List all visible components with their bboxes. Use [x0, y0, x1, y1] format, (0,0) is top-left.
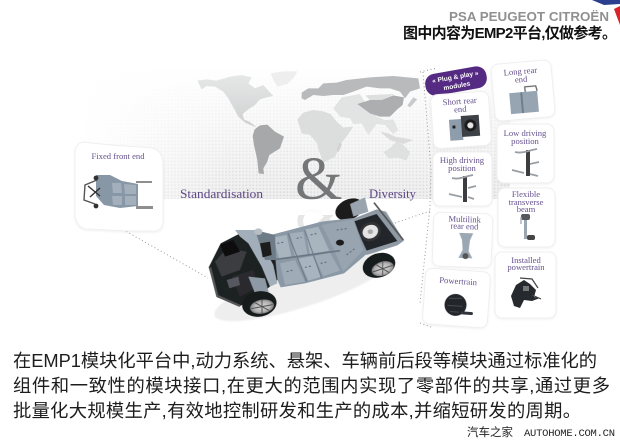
world map	[197, 71, 420, 174]
car platform chassis	[208, 194, 404, 335]
car shadow	[208, 239, 398, 335]
body text	[13, 350, 610, 421]
wheel: front near	[240, 289, 279, 319]
panel: flexible transverse beam: beam	[517, 204, 536, 214]
body text: 在EMP1模块化平台中,动力系统、悬架、车辆前后段等模块通过标准化的	[13, 350, 597, 371]
map: Russia and Europe	[302, 76, 420, 100]
panel: installed powertrain: Installed	[511, 255, 541, 265]
icon: transverse beam	[521, 214, 535, 240]
ampersand: &	[295, 146, 342, 213]
panel: short rear end: Short rear	[442, 95, 477, 107]
icon: low driving suspension	[512, 149, 539, 176]
panel: multilink rear end: rear end	[450, 221, 479, 232]
label: Diversity: Diversity	[369, 187, 417, 201]
panel: long rear end	[491, 59, 555, 122]
map: Middle East and South Asia	[333, 94, 398, 135]
panel: multilink rear end	[432, 212, 493, 268]
floor pan	[270, 218, 367, 287]
body text: 批量化大规模生产,有效地控制研发和生产的成本,并缩短研发的周期。	[13, 400, 581, 421]
panel: flexible transverse beam: transverse	[509, 197, 544, 207]
engine bay	[209, 228, 277, 306]
brand name: PSA PEUGEOT CITROËN	[449, 9, 609, 24]
note heading: 图中内容为EMP2平台,仅做参考。	[403, 24, 617, 42]
wheel: rear near	[359, 249, 399, 282]
panel: plug and play modules pill: modules	[443, 81, 471, 92]
wheel: rear far	[332, 194, 368, 225]
panel: high driving position: position	[448, 163, 477, 173]
map: North America	[197, 75, 273, 127]
panel: fixed front end: Fixed front end	[92, 151, 145, 161]
map: South East Asia islands	[380, 132, 413, 144]
dotted connector from fixed front end to car	[121, 216, 208, 278]
panel: multilink rear end: Multilink	[448, 213, 482, 225]
panel: long rear end: Long rear	[503, 65, 538, 78]
panel: low driving position: position	[511, 136, 540, 146]
icon: fixed front end platform	[84, 175, 153, 209]
panel: flexible powertrain	[422, 268, 491, 328]
map: Japan	[407, 97, 417, 107]
watermark	[467, 425, 615, 440]
panel: flexible transverse beam: Flexible	[512, 189, 540, 199]
panel: long rear end: end	[514, 74, 528, 85]
watermark: AUTOHOME.COM.CN	[524, 428, 615, 440]
watermark: 汽车之家	[467, 425, 513, 439]
panel: short rear end: end	[454, 104, 467, 114]
panel: flexible transverse beam	[498, 188, 555, 247]
panel: plug and play modules pill	[424, 65, 488, 97]
icon: installed powertrain	[511, 278, 541, 308]
panel: fixed front end	[75, 142, 163, 231]
panel: flexible powertrain: Powertrain	[439, 275, 478, 287]
map: South America	[253, 125, 284, 174]
body text: 组件和一致性的模块接口,在更大的范围内实现了零部件的共享,通过更多	[13, 375, 610, 396]
map: Mongolia	[365, 94, 395, 100]
map: Madagascar	[337, 143, 342, 152]
panel: short rear end	[430, 91, 492, 149]
icon: powertrain	[444, 293, 474, 317]
panel: plug and play modules pill: « Plug & play »	[432, 70, 479, 85]
map: Africa	[297, 110, 353, 163]
icon: long rear end	[509, 86, 539, 114]
panel: low driving position: Low driving	[504, 128, 547, 138]
panel: installed powertrain	[495, 252, 556, 318]
icon: short rear end	[449, 115, 480, 141]
panel: low driving position	[497, 124, 554, 183]
map: China	[357, 95, 404, 117]
panel: high driving position	[433, 152, 492, 206]
panel: logo corner flag	[592, 0, 620, 25]
icon: high driving suspension	[449, 175, 476, 202]
ampersand reflection: &	[295, 196, 342, 263]
panel: installed powertrain: powertrain	[507, 262, 545, 272]
map: Australia	[383, 141, 410, 161]
rear frame and spare wheel	[352, 203, 404, 255]
icon: multilink rear suspension	[458, 233, 473, 259]
panel: high driving position: High driving	[440, 155, 485, 165]
map: Greenland	[271, 71, 297, 87]
label: Standardisation: Standardisation	[180, 187, 264, 201]
dotted bracket around plug and play modules	[420, 68, 437, 327]
dotted connector from car to modules	[395, 211, 430, 223]
background: dotted horizon panel	[144, 100, 510, 199]
